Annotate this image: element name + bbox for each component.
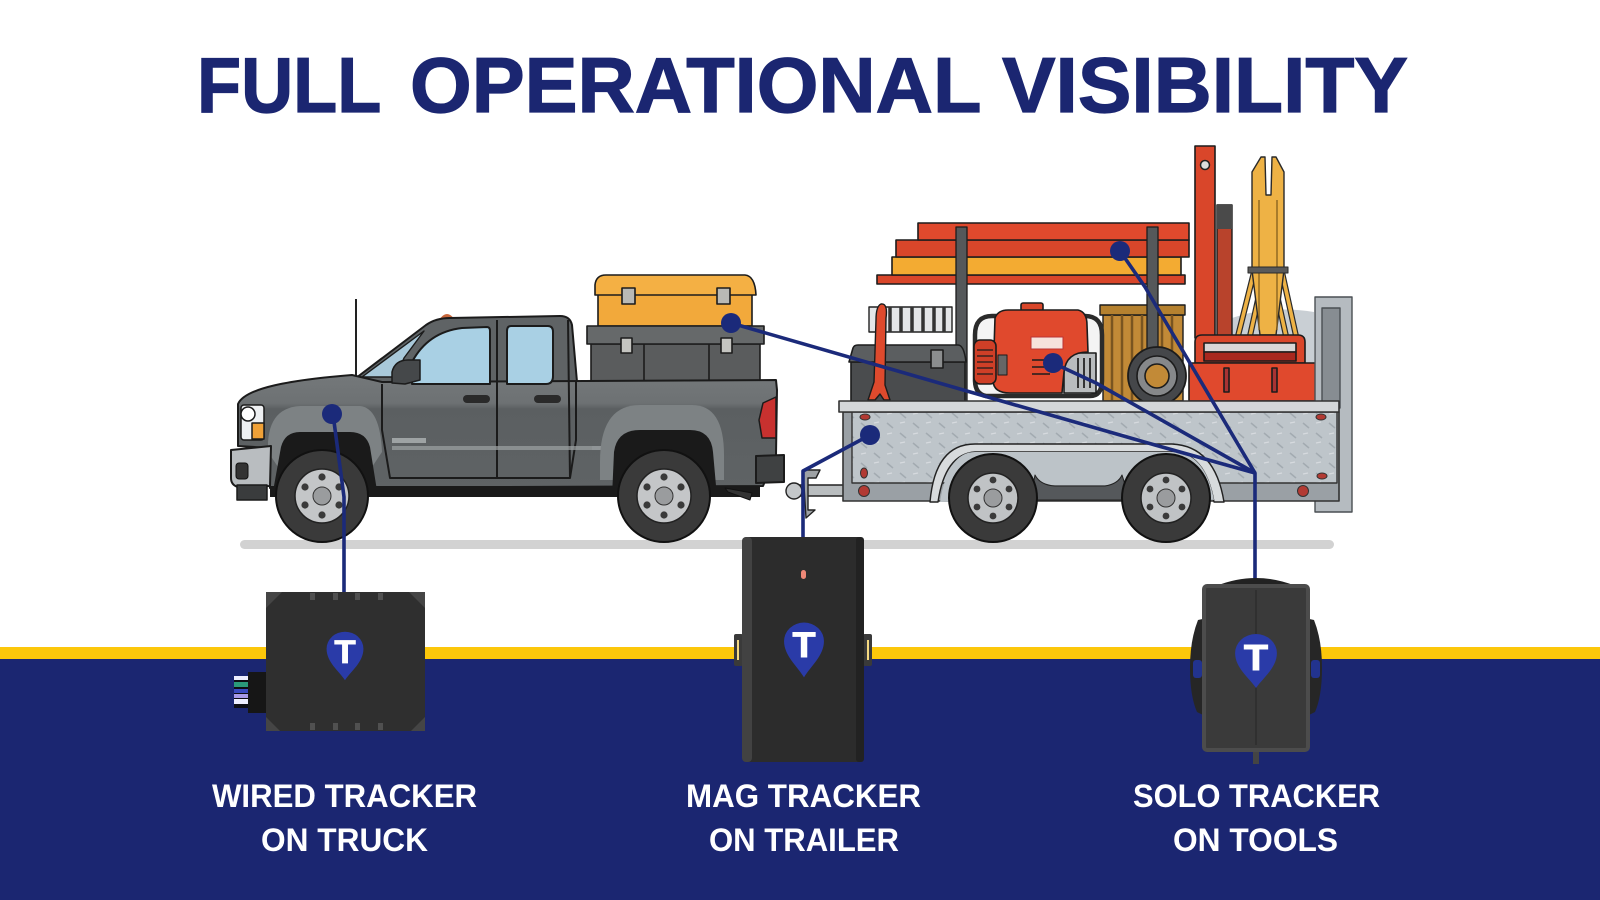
label: mag tracker: ON TRAILER <box>709 822 899 858</box>
toolbox <box>849 345 966 402</box>
rear window <box>507 326 553 384</box>
tall red level <box>1195 146 1215 338</box>
fender flares <box>268 405 724 480</box>
cargo: dark box <box>587 326 764 381</box>
title: FULL <box>197 41 380 129</box>
dark bar <box>1217 205 1232 345</box>
trailer wheel 2 <box>1122 454 1210 542</box>
windshield <box>362 331 424 377</box>
striped rack <box>869 307 952 332</box>
body trim strip <box>392 438 622 450</box>
front bumper <box>231 446 271 487</box>
rack posts <box>956 227 1158 401</box>
chassis <box>270 486 760 497</box>
T pin logo <box>1235 634 1277 688</box>
label: mag tracker: MAG TRACKER <box>686 778 921 814</box>
fender <box>930 444 1224 502</box>
diamond plate side panel <box>843 412 1339 501</box>
label: solo tracker: SOLO TRACKER <box>1133 778 1380 814</box>
truck antenna <box>355 299 357 378</box>
wheel arches <box>272 430 717 497</box>
mirror <box>392 360 420 384</box>
T pin logo: T <box>334 635 356 671</box>
T pin logo: T <box>792 625 816 665</box>
T pin logo: T <box>1244 639 1268 679</box>
mag tracker device <box>734 537 872 762</box>
truck <box>231 275 784 542</box>
connector dots <box>322 241 1130 445</box>
deck rail <box>839 401 1339 412</box>
marker lights <box>858 414 1327 496</box>
connector lines <box>333 251 1255 592</box>
red toolbox <box>1189 335 1317 401</box>
title: VISIBILITY <box>1002 41 1408 129</box>
solo tracker device <box>1190 578 1322 764</box>
trailer cargo <box>849 146 1317 405</box>
T pin logo <box>784 623 824 677</box>
yellow folding ladder <box>1238 157 1296 336</box>
truck cab <box>356 316 577 382</box>
hitch <box>786 470 844 518</box>
rear bumper <box>756 455 784 483</box>
truck amber roof light <box>439 314 455 320</box>
tailgate <box>1315 297 1352 512</box>
grey backdrop <box>1232 310 1314 400</box>
title: OPERATIONAL <box>410 41 980 129</box>
generator <box>974 303 1102 396</box>
label: wired tracker: WIRED TRACKER <box>212 778 477 814</box>
doors <box>382 320 576 478</box>
front window <box>412 327 490 384</box>
wired tracker device <box>234 592 425 731</box>
wire connector <box>234 672 280 713</box>
trailer <box>786 297 1352 542</box>
navy footer band with yellow stripe <box>0 647 1600 900</box>
cargo: yellow box <box>595 275 756 326</box>
label: wired tracker: ON TRUCK <box>261 822 428 858</box>
tail light <box>759 397 776 438</box>
headlights <box>241 405 264 440</box>
front wheel <box>276 450 368 542</box>
tire coil <box>1128 347 1186 405</box>
truck body <box>238 375 777 488</box>
LED <box>801 570 806 579</box>
T pin logo <box>327 632 363 680</box>
wooden crate <box>1100 305 1185 401</box>
lumber stack <box>877 223 1189 284</box>
label: solo tracker: ON TOOLS <box>1173 822 1338 858</box>
red wrench <box>868 304 890 400</box>
rear wheel <box>618 450 710 542</box>
trailer wheel 1 <box>949 454 1037 542</box>
ground line <box>240 540 1334 549</box>
door handles <box>463 395 561 403</box>
